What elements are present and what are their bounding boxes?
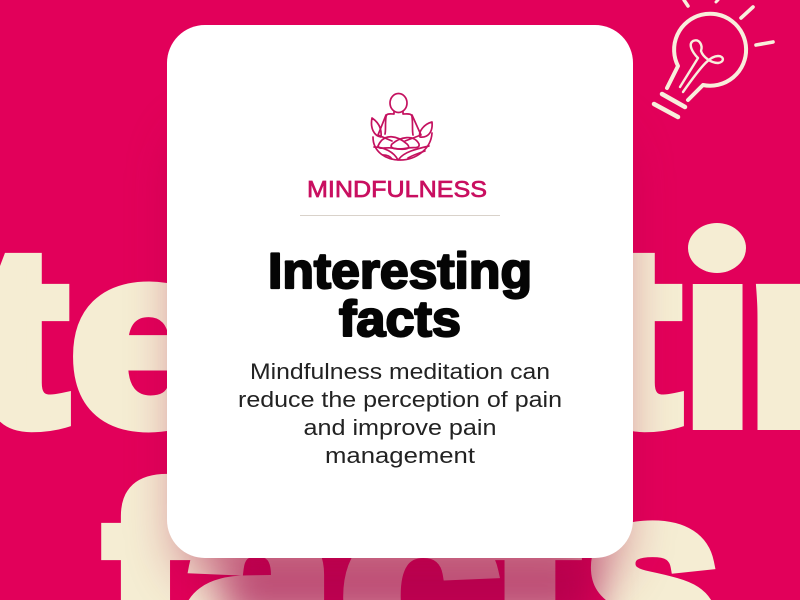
divider: [300, 215, 500, 216]
body text: [238, 359, 562, 468]
heading: [268, 243, 532, 347]
body text: Mindfulness meditation can: [250, 359, 550, 384]
icon: meditating figure: [371, 94, 432, 160]
body text: management: [325, 443, 476, 468]
body text: reduce the perception of pain: [238, 387, 562, 412]
heading: facts: [339, 291, 461, 347]
white card: [167, 25, 633, 558]
background word: teresting: i: [682, 196, 754, 476]
heading: Interesting: [268, 243, 532, 299]
background word: teresting: [0, 196, 800, 476]
background word: teresting: e: [70, 197, 223, 476]
brand label: MINDFULNESS: [307, 176, 487, 202]
background word: teresting: t: [588, 197, 680, 476]
body text: and improve pain: [304, 415, 496, 440]
icon: light bulb: [654, 0, 773, 117]
background word: facts: [101, 474, 716, 600]
card shadow: [180, 130, 620, 600]
